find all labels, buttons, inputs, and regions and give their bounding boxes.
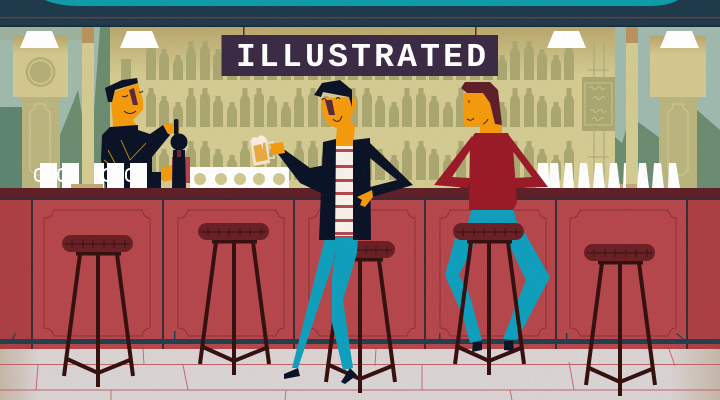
jacket left side	[319, 139, 336, 240]
hair	[105, 78, 138, 102]
neck and head	[321, 97, 356, 148]
neck and head	[463, 92, 502, 134]
face lines	[122, 91, 143, 114]
sweater left arm	[434, 136, 472, 188]
right pillar	[650, 36, 706, 188]
left clock pillar	[13, 36, 68, 188]
right leg	[503, 228, 550, 340]
fist	[270, 142, 285, 155]
patron in red sweater	[434, 82, 550, 352]
sweater body	[469, 133, 517, 210]
left window	[0, 27, 110, 190]
white coaster tray	[190, 167, 289, 188]
bar counter top	[0, 188, 720, 200]
hand on glass	[161, 165, 172, 182]
nose	[325, 100, 335, 115]
neck and head	[110, 83, 143, 131]
ceiling band	[0, 0, 720, 27]
face lines	[322, 98, 342, 121]
striped shirt	[335, 146, 353, 236]
stool 4	[453, 223, 524, 375]
bar front	[0, 200, 720, 349]
hand on tap	[163, 122, 180, 134]
raised arm	[278, 150, 325, 194]
bottles lower shelf	[146, 141, 574, 180]
hair	[461, 82, 502, 125]
foot rail	[0, 331, 720, 344]
jacket	[101, 125, 170, 188]
bottles top shelf	[121, 41, 574, 80]
hand on hip	[357, 190, 373, 207]
left leg	[445, 228, 482, 343]
beer mug	[250, 135, 274, 166]
shoes	[472, 341, 514, 352]
stool 5	[584, 244, 655, 396]
ceiling teal panel	[45, 0, 678, 6]
right leg	[332, 238, 358, 370]
sign title: ILLUSTRATED	[236, 39, 486, 76]
left leg	[292, 238, 338, 368]
other arm	[370, 143, 413, 197]
lamps	[20, 31, 699, 48]
pink beer glass	[172, 157, 190, 183]
coasters	[71, 184, 648, 188]
pants top	[467, 208, 518, 226]
jacket trim	[104, 140, 146, 166]
beer tap	[170, 119, 188, 188]
white mugs left	[35, 163, 147, 188]
stool 2	[198, 223, 269, 375]
stool 3	[324, 241, 395, 393]
sweater right arm	[508, 134, 548, 188]
nose	[129, 88, 138, 105]
menu board	[582, 42, 615, 188]
floor	[0, 349, 720, 400]
back wall	[110, 27, 615, 190]
hair	[314, 80, 352, 107]
white glasses right	[536, 163, 680, 188]
shoes	[284, 368, 357, 384]
bottles middle shelf	[146, 88, 574, 127]
face lines	[467, 100, 488, 124]
elbows shadow	[460, 178, 525, 188]
hanging sign	[222, 27, 498, 76]
right window	[615, 27, 720, 190]
bartender	[101, 78, 190, 188]
jacket right side	[353, 138, 371, 240]
stool 1	[62, 235, 133, 387]
patron with beer	[250, 80, 413, 384]
